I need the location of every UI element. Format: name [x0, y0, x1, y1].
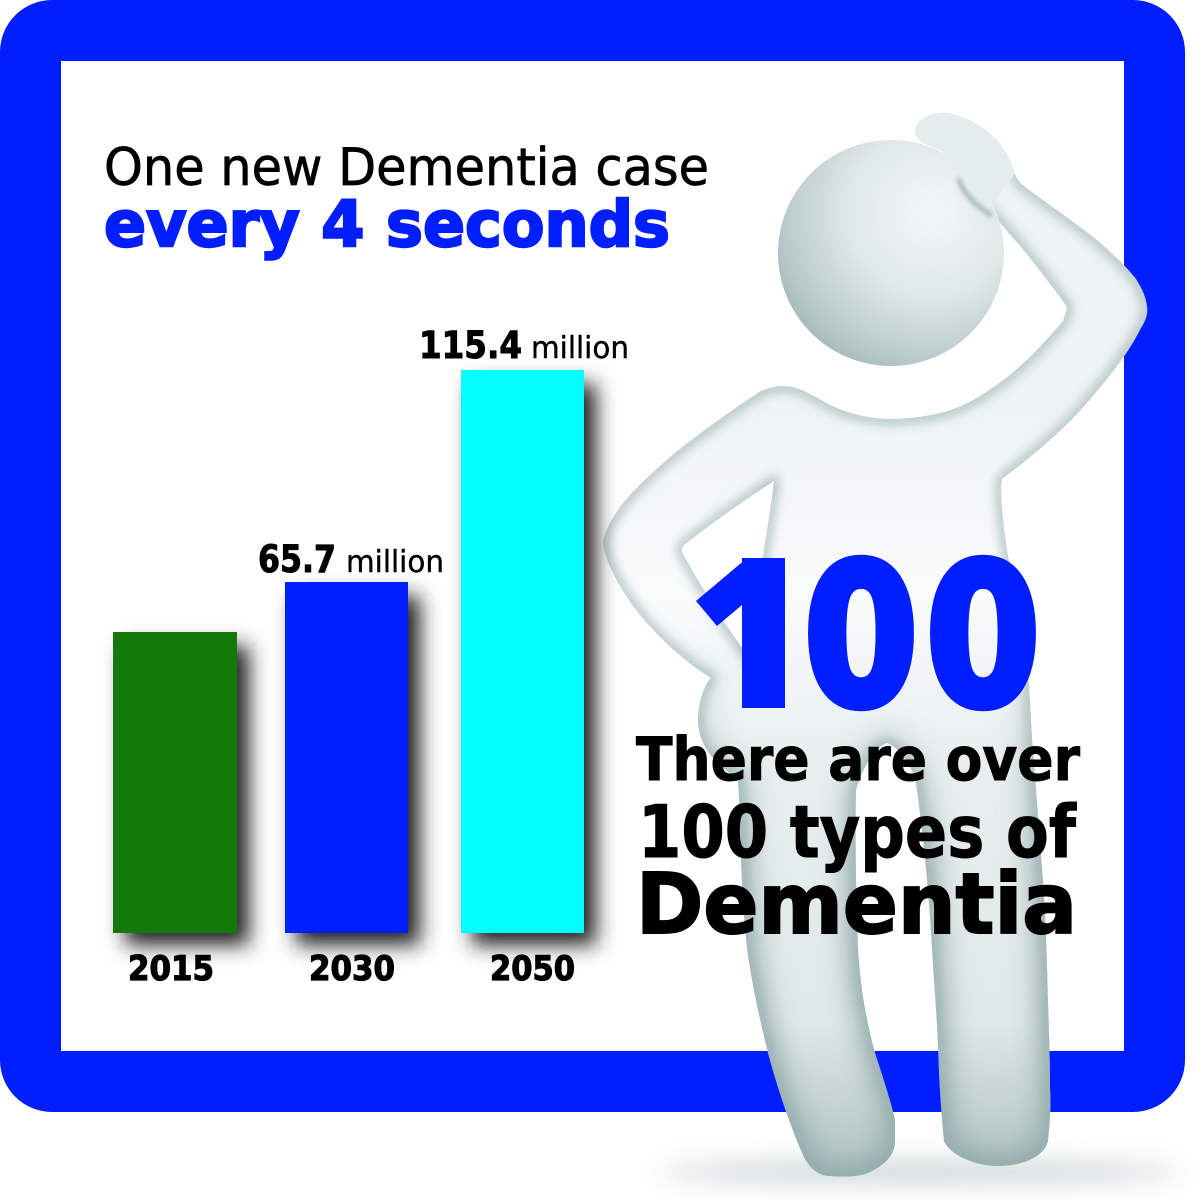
value label: 115.4 million: 115.4: [419, 324, 522, 367]
axis label: 2015: 2015: [128, 949, 214, 989]
bar chart: dementia cases: [113, 324, 629, 989]
big number: 100: 0: [926, 524, 1040, 751]
big number: 100: 0: [804, 524, 918, 751]
heading: every 4 seconds: every 4 seconds: [104, 188, 670, 261]
text block: there are over 100 types of dementia: There are over: [636, 725, 1080, 795]
big number: 100: [696, 554, 1036, 712]
big number: 100: 1: [692, 523, 828, 750]
text block: there are over 100 types of dementia: 100 types of: [638, 790, 1077, 874]
value label: 65.7 million: million: [346, 545, 444, 580]
bar: 2050: [461, 370, 596, 945]
text block: there are over 100 types of dementia: [636, 725, 1080, 953]
bar: 2030: [285, 582, 420, 945]
value label: 115.4 million: [419, 324, 629, 367]
hand shadow crease: [958, 178, 992, 216]
text block: there are over 100 types of dementia: Dementia: [636, 855, 1077, 953]
value label: 115.4 million: million: [531, 331, 629, 366]
value label: 65.7 million: 65.7: [258, 538, 336, 581]
figure hand on head: [915, 113, 1015, 209]
figure: thinking 3D person: [590, 100, 1180, 1190]
floor shadow: [660, 1160, 1180, 1184]
value label: 65.7 million: [258, 538, 444, 581]
figure head: [778, 140, 1004, 366]
bar: 2015: [113, 632, 249, 945]
axis label: 2050: 2050: [490, 949, 575, 989]
figure body: [590, 100, 1160, 1190]
axis label: 2030: 2030: [309, 949, 395, 989]
heading: one new dementia case: One new Dementia case: [104, 138, 709, 198]
